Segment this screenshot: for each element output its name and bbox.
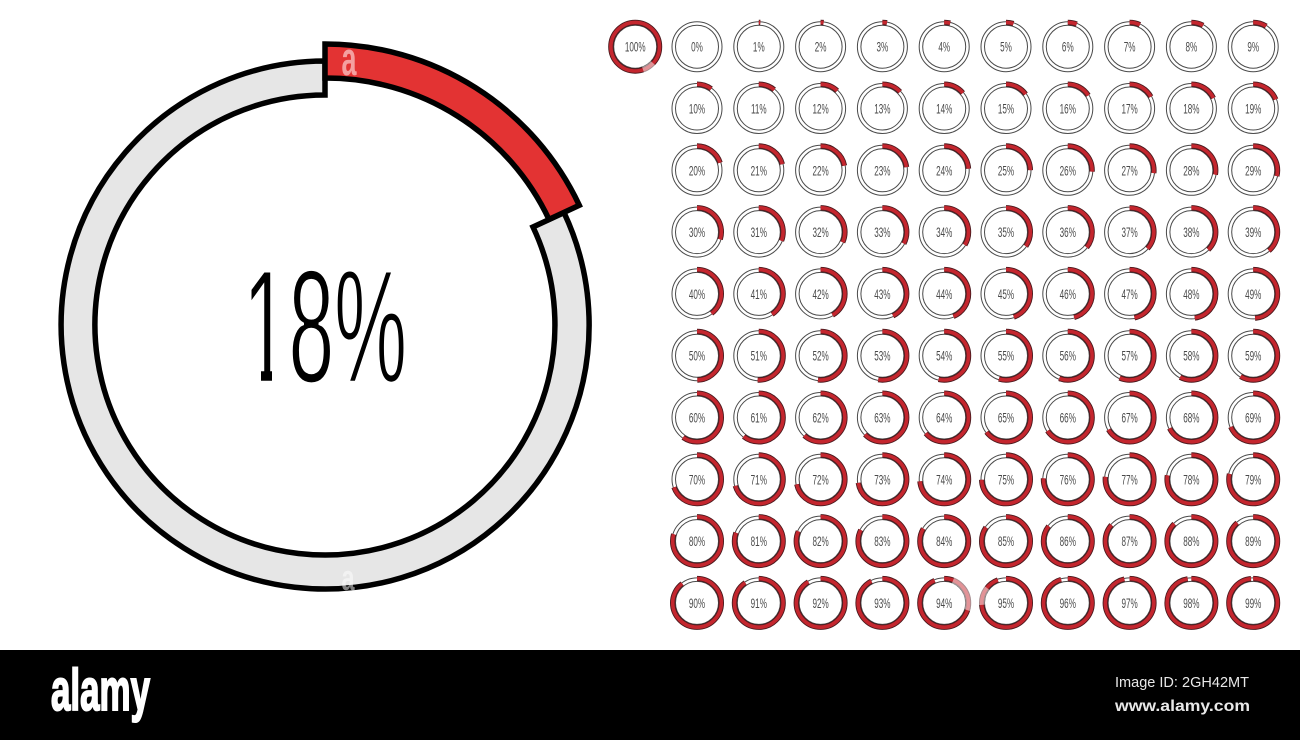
- ring 100%: 100%: [625, 41, 646, 55]
- ring 51%: [734, 331, 784, 381]
- ring 28%: [1166, 145, 1216, 195]
- ring 7%: 7%: [1124, 41, 1135, 55]
- ring 39%: [1228, 207, 1278, 257]
- ring 66%: [1043, 392, 1093, 442]
- ring 42%: [796, 269, 846, 319]
- ring 91%: [734, 578, 784, 628]
- ring 19%: [1228, 84, 1278, 134]
- ring 52%: [796, 331, 846, 381]
- ring 94%: 94%: [936, 597, 952, 612]
- ring 94%: [919, 578, 969, 628]
- ring 4%: 4%: [938, 41, 950, 55]
- ring 95%: [981, 578, 1031, 628]
- ring 75%: [981, 454, 1031, 504]
- ring 96%: [1043, 578, 1093, 628]
- ring 50%: [672, 331, 722, 381]
- ring 52%: 52%: [812, 350, 829, 364]
- ring 24%: 24%: [936, 164, 952, 179]
- ring 43%: [857, 269, 907, 319]
- ring 98%: [1166, 578, 1216, 628]
- ring 85%: 85%: [998, 535, 1014, 550]
- ring 14%: [919, 84, 969, 134]
- ring 73%: 73%: [874, 473, 891, 488]
- ring 29%: [1228, 145, 1278, 195]
- ring 61%: 61%: [751, 411, 767, 426]
- ring 31%: 31%: [751, 226, 767, 241]
- ring 23%: [857, 145, 907, 195]
- large percentage label: 18%: [243, 237, 407, 417]
- ring 49%: 49%: [1245, 288, 1261, 303]
- ring 32%: [796, 207, 846, 257]
- ring 33%: [857, 207, 907, 257]
- ring 93%: [857, 578, 907, 628]
- ring 68%: [1166, 392, 1216, 442]
- ring 73%: [857, 454, 907, 504]
- image id: Image ID: 2GH42MT: [1115, 674, 1249, 691]
- ring 98%: 98%: [1183, 597, 1200, 612]
- ring 58%: 58%: [1183, 350, 1200, 364]
- mask: left foot of numeral one: [242, 364, 261, 384]
- ring 47%: [1105, 269, 1155, 319]
- ring 75%: 75%: [998, 473, 1014, 488]
- ring 72%: 72%: [812, 473, 829, 488]
- ring 34%: 34%: [936, 226, 952, 241]
- ring 30%: 30%: [689, 226, 705, 241]
- ring 13%: [857, 84, 907, 134]
- ring 8%: 8%: [1186, 41, 1197, 55]
- ring 16%: [1043, 84, 1093, 134]
- ring 26%: [1043, 145, 1093, 195]
- ring 11%: 11%: [751, 102, 767, 117]
- ring 81%: [734, 516, 784, 566]
- ring 10%: 10%: [689, 102, 705, 117]
- ring 13%: 13%: [874, 102, 891, 117]
- ring 84%: [919, 516, 969, 566]
- ring 69%: [1228, 392, 1278, 442]
- ring 36%: [1043, 207, 1093, 257]
- ring 88%: [1166, 516, 1216, 566]
- ring 64%: [919, 392, 969, 442]
- ring 9%: 9%: [1247, 41, 1259, 55]
- ring 83%: [857, 516, 907, 566]
- ring 15%: [981, 84, 1031, 134]
- ring 86%: [1043, 516, 1093, 566]
- ring 12%: 12%: [812, 102, 829, 117]
- ring 43%: 43%: [874, 288, 891, 303]
- ring 55%: [981, 331, 1031, 381]
- ring 42%: 42%: [812, 288, 829, 303]
- ring 17%: [1105, 84, 1155, 134]
- ring 47%: 47%: [1121, 288, 1138, 303]
- ring 76%: 76%: [1060, 473, 1076, 488]
- ring 88%: 88%: [1183, 535, 1200, 550]
- ring 90%: 90%: [689, 597, 705, 612]
- ring 29%: 29%: [1245, 164, 1261, 179]
- ring 85%: [981, 516, 1031, 566]
- ring 84%: 84%: [936, 535, 952, 550]
- ring 37%: [1105, 207, 1155, 257]
- ring 65%: 65%: [998, 411, 1014, 426]
- website: www.alamy.com: [1114, 698, 1250, 715]
- ring 54%: 54%: [936, 350, 952, 364]
- ring 17%: 17%: [1121, 102, 1138, 117]
- ring 5%: 5%: [1000, 41, 1012, 55]
- ring 10%: [672, 84, 722, 134]
- ring 87%: 87%: [1121, 535, 1138, 550]
- ring 46%: [1043, 269, 1093, 319]
- ring 11%: [734, 84, 784, 134]
- ring 77%: [1105, 454, 1155, 504]
- alamy logo: alamy: [51, 658, 150, 723]
- ring 70%: [672, 454, 722, 504]
- ring 15%: 15%: [998, 102, 1014, 117]
- ring 63%: 63%: [874, 411, 891, 426]
- ring 40%: [672, 269, 722, 319]
- ring 54%: [919, 331, 969, 381]
- ring 79%: [1228, 454, 1278, 504]
- ring 19%: 19%: [1245, 102, 1261, 117]
- ring 35%: 35%: [998, 226, 1014, 241]
- ring 58%: [1166, 331, 1216, 381]
- ring 89%: [1228, 516, 1278, 566]
- ring 39%: 39%: [1245, 226, 1261, 241]
- watermark letter on red arc: a: [342, 32, 357, 85]
- ring 23%: 23%: [874, 164, 891, 179]
- footer bar: [0, 650, 1300, 740]
- ring 6%: [1043, 22, 1093, 72]
- ring 36%: 36%: [1060, 226, 1076, 241]
- ring 60%: 60%: [689, 411, 705, 426]
- ring 49%: [1228, 269, 1278, 319]
- ring 32%: 32%: [812, 226, 829, 241]
- ring 21%: [734, 145, 784, 195]
- ring 46%: 46%: [1060, 288, 1076, 303]
- ring 4%: [919, 22, 969, 72]
- ring 24%: [919, 145, 969, 195]
- ring 59%: [1228, 331, 1278, 381]
- ring 53%: [857, 331, 907, 381]
- ring 2%: 2%: [815, 41, 826, 55]
- ring 9%: [1228, 22, 1278, 72]
- ring 77%: 77%: [1121, 473, 1138, 488]
- ring 31%: [734, 207, 784, 257]
- ring 40%: 40%: [689, 288, 705, 303]
- ring 0%: 0%: [691, 41, 703, 55]
- ring 30%: [672, 207, 722, 257]
- ring 100%: [610, 22, 660, 72]
- ring 44%: [919, 269, 969, 319]
- ring 78%: 78%: [1183, 473, 1200, 488]
- ring 22%: [796, 145, 846, 195]
- ring 48%: [1166, 269, 1216, 319]
- ring 71%: 71%: [751, 473, 767, 488]
- ring 59%: 59%: [1245, 350, 1261, 364]
- ring 97%: 97%: [1121, 597, 1138, 612]
- ring 51%: 51%: [751, 350, 767, 364]
- ring 56%: [1043, 331, 1093, 381]
- ring 76%: [1043, 454, 1093, 504]
- ring 91%: 91%: [751, 597, 767, 612]
- ring 72%: [796, 454, 846, 504]
- ring 81%: 81%: [751, 535, 767, 550]
- ring 6%: 6%: [1062, 41, 1074, 55]
- ring 95%: 95%: [998, 597, 1014, 612]
- ring 68%: 68%: [1183, 411, 1200, 426]
- ring 55%: 55%: [998, 350, 1014, 364]
- ring 21%: 21%: [751, 164, 767, 179]
- ring 67%: 67%: [1121, 411, 1138, 426]
- ring 12%: [796, 84, 846, 134]
- ring 7%: [1105, 22, 1155, 72]
- ring 56%: 56%: [1060, 350, 1076, 364]
- ring 99%: 99%: [1245, 597, 1261, 612]
- ring 80%: [672, 516, 722, 566]
- ring 27%: [1105, 145, 1155, 195]
- ring 3%: 3%: [877, 41, 888, 55]
- ring 35%: [981, 207, 1031, 257]
- ring 70%: 70%: [689, 473, 705, 488]
- ring 22%: 22%: [812, 164, 829, 179]
- ring 16%: 16%: [1060, 102, 1076, 117]
- ring 41%: [734, 269, 784, 319]
- ring 62%: [796, 392, 846, 442]
- ring 41%: 41%: [751, 288, 767, 303]
- ring 67%: [1105, 392, 1155, 442]
- ring 65%: [981, 392, 1031, 442]
- ring 26%: 26%: [1060, 164, 1076, 179]
- ring 33%: 33%: [874, 226, 891, 241]
- ring 74%: 74%: [936, 473, 952, 488]
- ring 25%: [981, 145, 1031, 195]
- ring 53%: 53%: [874, 350, 891, 364]
- large ring red progress arc: [325, 44, 579, 219]
- ring 3%: [857, 22, 907, 72]
- ring 86%: 86%: [1060, 535, 1076, 550]
- ring 48%: 48%: [1183, 288, 1200, 303]
- ring 71%: [734, 454, 784, 504]
- ring 57%: 57%: [1121, 350, 1138, 364]
- ring 38%: [1166, 207, 1216, 257]
- ring 38%: 38%: [1183, 226, 1200, 241]
- watermark letter on grey track: a: [342, 557, 355, 598]
- ring 80%: 80%: [689, 535, 705, 550]
- ring 0%: [672, 22, 722, 72]
- ring 27%: 27%: [1121, 164, 1138, 179]
- ring 34%: [919, 207, 969, 257]
- small ring grid: [610, 22, 1278, 628]
- ring 61%: [734, 392, 784, 442]
- ring 99%: [1228, 578, 1278, 628]
- ring 18%: [1166, 84, 1216, 134]
- ring 83%: 83%: [874, 535, 891, 550]
- ring 8%: [1166, 22, 1216, 72]
- ring 45%: 45%: [998, 288, 1014, 303]
- ring 28%: 28%: [1183, 164, 1200, 179]
- ring 62%: 62%: [812, 411, 829, 426]
- ring 1%: 1%: [753, 41, 765, 55]
- ring 90%: [672, 578, 722, 628]
- ring 20%: [672, 145, 722, 195]
- ring 44%: 44%: [936, 288, 952, 303]
- ring 97%: [1105, 578, 1155, 628]
- ring 14%: 14%: [936, 102, 952, 117]
- ring 96%: 96%: [1060, 597, 1076, 612]
- ring 69%: 69%: [1245, 411, 1261, 426]
- ring 45%: [981, 269, 1031, 319]
- large progress ring: 18%: [61, 44, 589, 589]
- ring 50%: 50%: [689, 350, 705, 364]
- ring 64%: 64%: [936, 411, 952, 426]
- ring 74%: [919, 454, 969, 504]
- ring 92%: [796, 578, 846, 628]
- ring 20%: 20%: [689, 164, 705, 179]
- ring 2%: [796, 22, 846, 72]
- ring 93%: 93%: [874, 597, 891, 612]
- large ring remaining grey track: [61, 61, 589, 589]
- ring 87%: [1105, 516, 1155, 566]
- ring 60%: [672, 392, 722, 442]
- ring 79%: 79%: [1245, 473, 1261, 488]
- ring 63%: [857, 392, 907, 442]
- ring 5%: [981, 22, 1031, 72]
- ring 1%: [734, 22, 784, 72]
- ring 57%: [1105, 331, 1155, 381]
- ring 37%: 37%: [1121, 226, 1138, 241]
- ring 78%: [1166, 454, 1216, 504]
- ring 82%: 82%: [812, 535, 829, 550]
- ring 25%: 25%: [998, 164, 1014, 179]
- ring 89%: 89%: [1245, 535, 1261, 550]
- ring 82%: [796, 516, 846, 566]
- ring 92%: 92%: [812, 597, 829, 612]
- ring 18%: 18%: [1183, 102, 1200, 117]
- ring 66%: 66%: [1060, 411, 1076, 426]
- mask: right foot of numeral one: [272, 364, 284, 384]
